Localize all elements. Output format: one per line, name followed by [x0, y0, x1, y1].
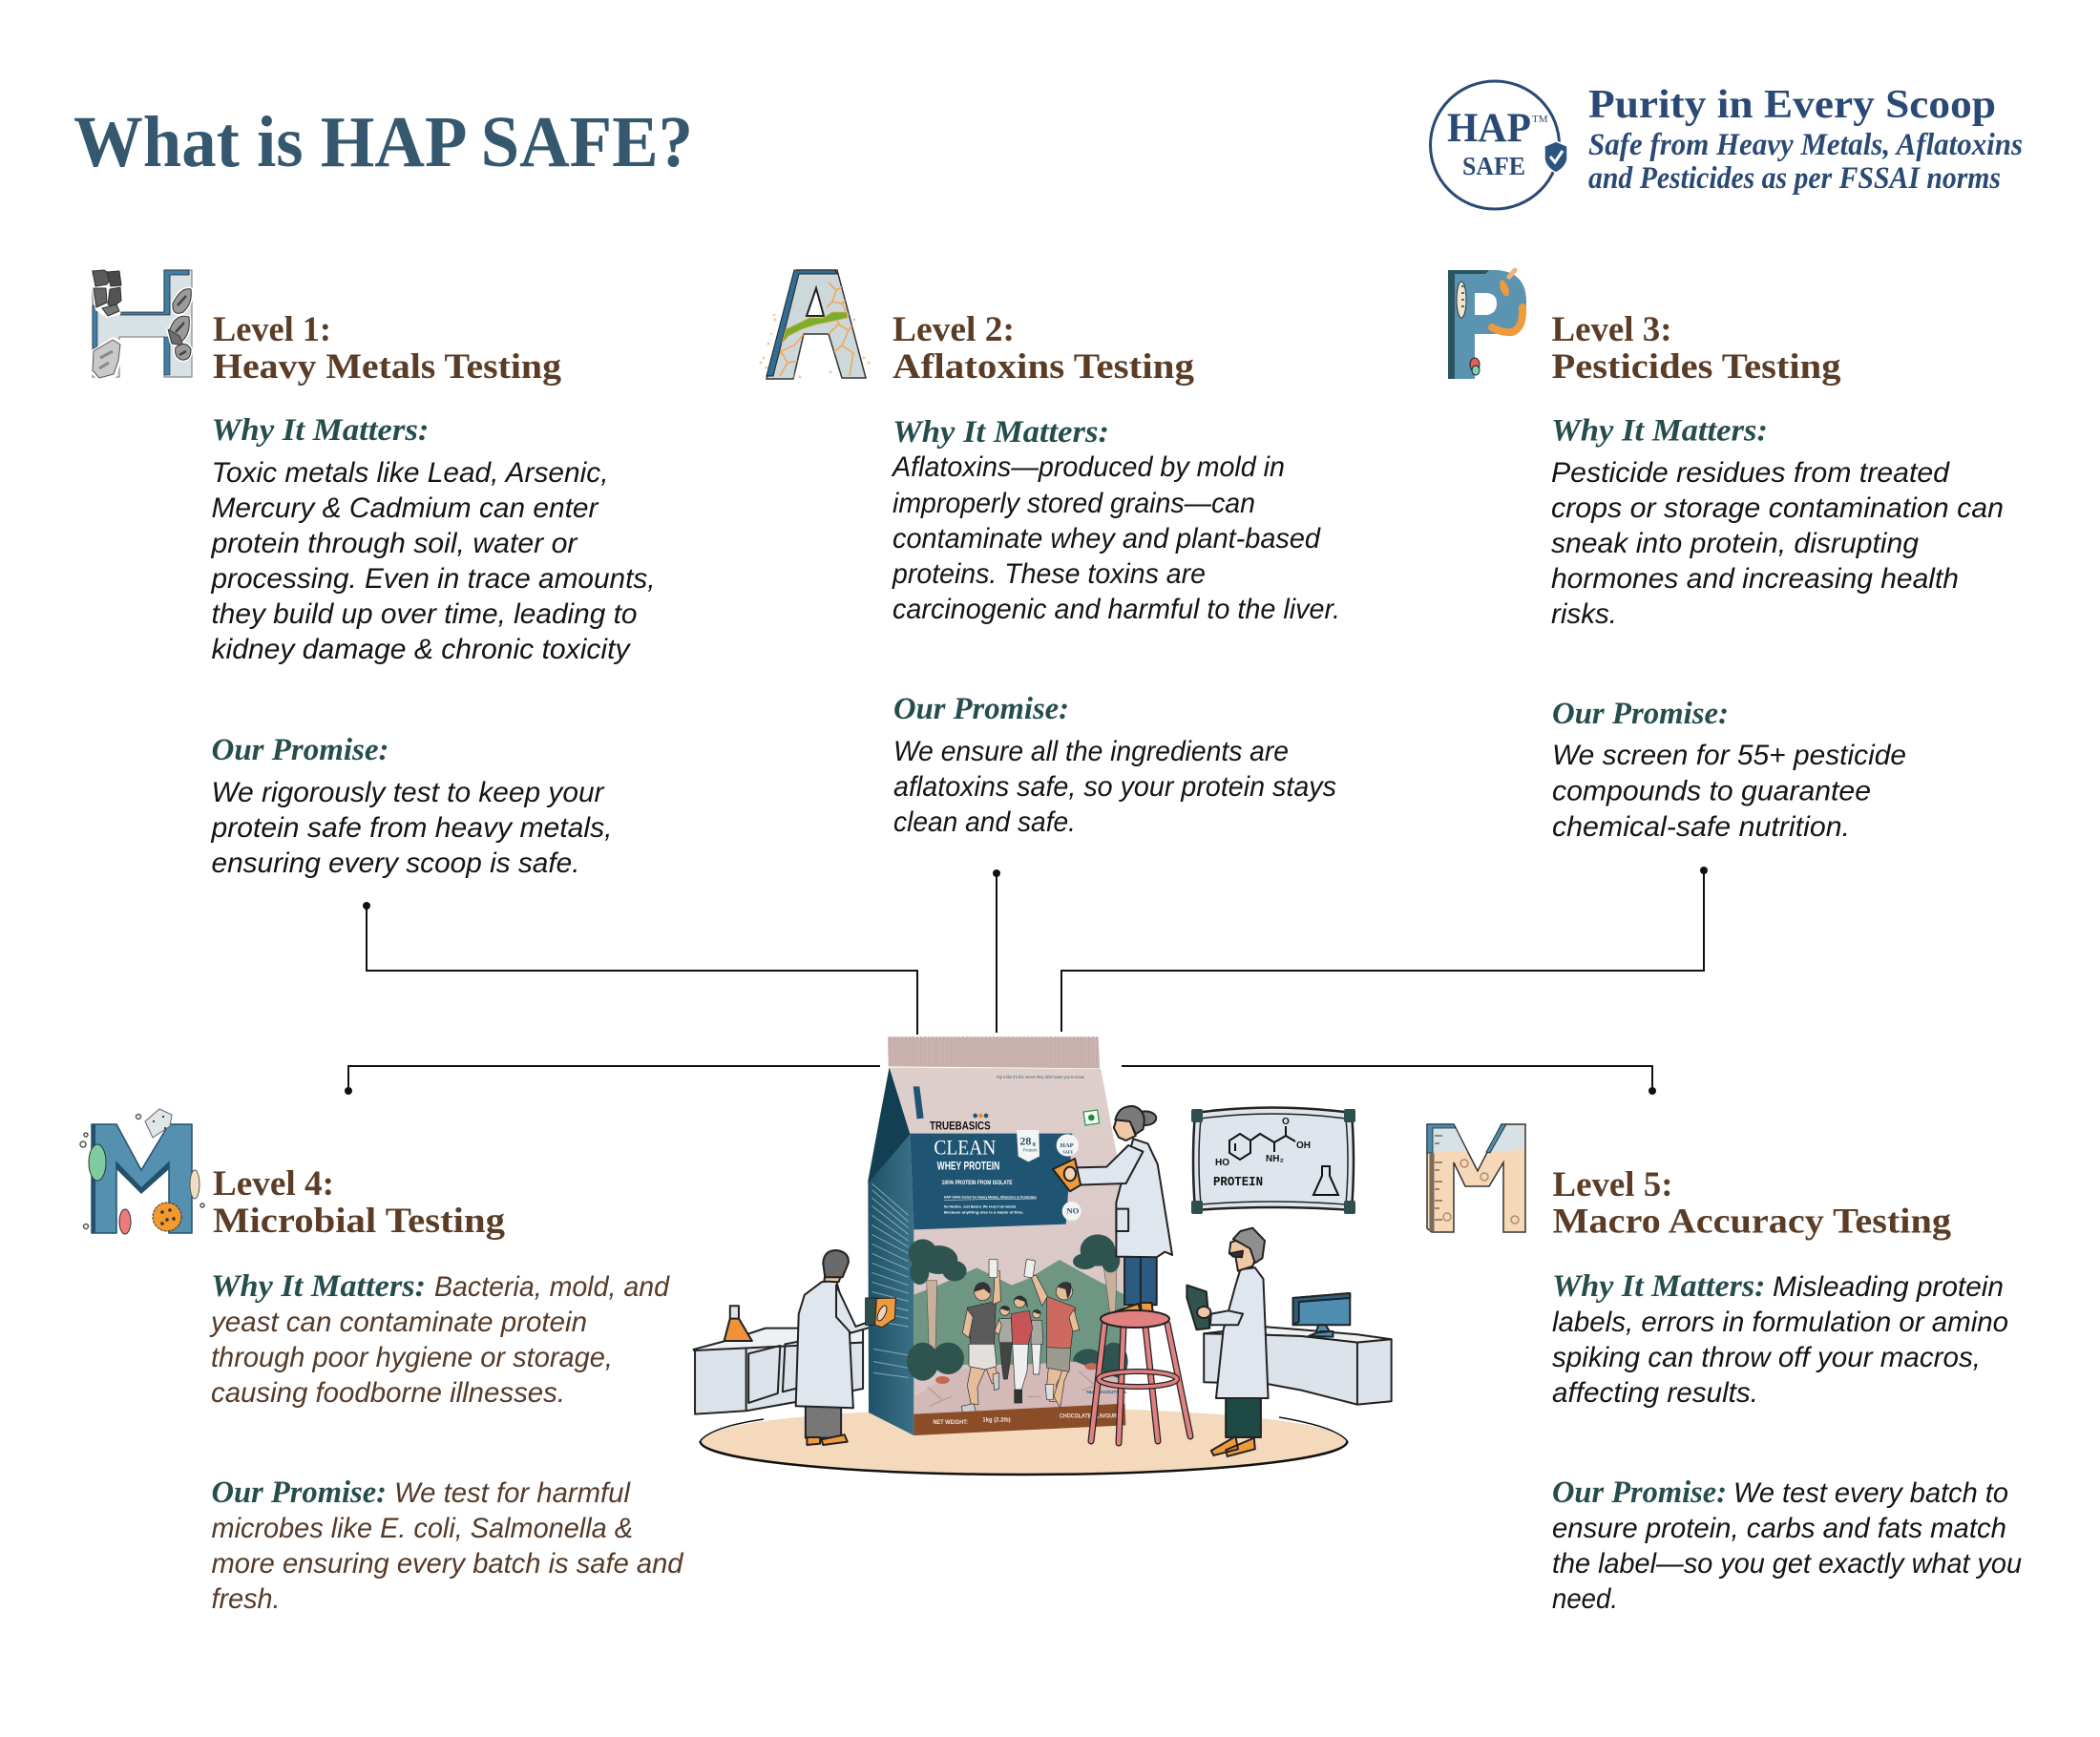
bag label text: Rip it like it's the secret they didn't want you to know. [997, 1075, 1085, 1079]
bag label text: WHEY PROTEIN [937, 1160, 999, 1173]
text: level 1 our promise: protein safe from heavy metals, [210, 812, 613, 844]
bag front face [890, 1067, 1125, 1435]
bag label text: Because anything else is a waste of time. [944, 1209, 1024, 1214]
bag label text: NO [1066, 1205, 1080, 1215]
text: level 4 why it matters: Bacteria, mold, and [434, 1271, 670, 1303]
text: level 3 why it matters: risks. [1551, 598, 1617, 630]
whiteboard: PROTEIN [1213, 1175, 1263, 1190]
brown weight bar [914, 1390, 1127, 1435]
bag crimp top [888, 1036, 1100, 1068]
title: What is HAP SAFE? [74, 102, 693, 182]
text: level 3 our promise: chemical-safe nutrition. [1552, 811, 1850, 843]
tagline: Safe from Heavy Metals, Aflatoxins [1588, 128, 2023, 162]
text: level 2 why it matters: improperly stored grains—can [892, 488, 1255, 519]
logo: HAP SAFE badge: TM [1532, 114, 1548, 125]
text: level 1 our promise: ensuring every scoop is safe. [212, 848, 580, 879]
text: level 4 why it matters: causing foodborne illnesses. [211, 1377, 565, 1409]
product bag [868, 1036, 1128, 1435]
bag label text: No Nasties, Just Basics. We keep it all natural. [944, 1203, 1017, 1208]
text: level 3 our promise [1552, 697, 1906, 843]
text: level 3 why it matters [1551, 414, 2004, 630]
bag label text: CLEAN [934, 1135, 996, 1159]
tagline: Purity in Every Scoop [1588, 83, 1996, 127]
tagline [1588, 83, 2023, 196]
illustration: mountains and trees [907, 1234, 1128, 1414]
right lab bench and monitor [1204, 1293, 1392, 1405]
orange flask [724, 1306, 752, 1341]
text: level 5 our promise: We test every batch to [1733, 1477, 2008, 1509]
text: level 4 our promise: microbes like E. coli, Salmonella & [212, 1513, 633, 1544]
text: level 3 our promise: We screen for 55+ pesticide [1552, 740, 1906, 771]
heading: level 5: Level 5: [1552, 1165, 1672, 1204]
text: level 2 our promise [893, 692, 1336, 838]
whiteboard [1191, 1107, 1355, 1214]
logo: HAP SAFE badge: SAFE [1462, 152, 1525, 180]
text: level 4 our promise [212, 1475, 684, 1615]
tab [914, 1086, 924, 1119]
text: level 5 our promise [1552, 1475, 2022, 1615]
text: level 1 why it matters: processing. Even in trace amounts, [211, 563, 655, 595]
text: level 5 why it matters: Why It Matters: [1552, 1269, 1766, 1304]
heading: level 3: Level 3: [1552, 310, 1672, 349]
brown weight bar: NET WEIGHT: [933, 1419, 968, 1426]
central lab scene [694, 1036, 1392, 1475]
text: level 3 why it matters: crops or storage contamination can [1551, 492, 2004, 524]
text: level 2 why it matters: Why It Matters: [892, 415, 1109, 450]
text: level 2 why it matters [891, 415, 1340, 625]
heading: level 1: Heavy Metals Testing [213, 347, 562, 387]
text: level 3 why it matters: hormones and increasing health [1551, 563, 1959, 595]
bag label text [930, 1075, 1100, 1221]
text: level 5 why it matters: spiking can throw off your macros, [1552, 1342, 1981, 1373]
tagline: and Pesticides as per FSSAI norms [1588, 161, 2001, 196]
text: level 5 why it matters: Misleading protein [1773, 1271, 2004, 1303]
icon: letter M with microbes [80, 1109, 204, 1234]
back right runner [1031, 1309, 1043, 1374]
text: level 3 our promise: Our Promise: [1552, 697, 1729, 731]
left lab bench [694, 1329, 863, 1414]
right runner [1024, 1259, 1080, 1408]
text: level 1 why it matters: Mercury & Cadmium can enter [212, 492, 598, 524]
heading: level 2 [892, 310, 1195, 387]
text: level 2 our promise: We ensure all the ingredients are [893, 736, 1289, 767]
text: level 1 why it matters: protein through soil, water or [210, 528, 578, 559]
text: level 4 why it matters: Why It Matters: [211, 1269, 426, 1304]
text: level 1 our promise: We rigorously test to keep your [212, 777, 605, 808]
text: level 2 why it matters: Aflatoxins—produced by mold in [891, 451, 1285, 483]
heading: level 2: Level 2: [892, 310, 1015, 349]
text: level 1 our promise [210, 733, 613, 879]
text: level 3 why it matters: sneak into protein, disrupting [1551, 528, 1919, 559]
text: level 2 our promise: Our Promise: [893, 692, 1069, 726]
text: level 5 why it matters: labels, errors in formulation or amino [1552, 1307, 2008, 1338]
bag label text: 28 [1019, 1134, 1031, 1147]
brown weight bar: 1kg (2.2lb) [982, 1417, 1011, 1424]
right scientist [1186, 1228, 1269, 1456]
whiteboard: HO [1215, 1158, 1229, 1168]
text: level 1 why it matters: Why It Matters: [212, 413, 430, 448]
text: level 5 our promise: need. [1552, 1583, 1618, 1615]
heading: level 1 [213, 310, 562, 387]
text: level 5 why it matters: affecting results. [1552, 1377, 1758, 1409]
text: level 4 our promise: We test for harmful [394, 1477, 631, 1509]
connector lines [345, 867, 1708, 1095]
heading: level 3: Pesticides Testing [1552, 347, 1841, 387]
heading: level 4: Level 4: [213, 1164, 334, 1203]
left scientist [796, 1250, 878, 1445]
heading: level 5 [1552, 1165, 1952, 1241]
logo: HAP SAFE badge: HAP [1447, 106, 1531, 151]
text: level 3 why it matters: Why It Matters: [1551, 414, 1768, 449]
centre runner [1011, 1296, 1033, 1403]
text: level 1 why it matters: kidney damage & chronic toxicity [212, 634, 632, 665]
text: level 1 our promise: Our Promise: [212, 733, 389, 767]
back left runner [995, 1306, 1013, 1379]
bag label text: g [1033, 1141, 1036, 1147]
bag label text: Protein [1023, 1148, 1038, 1153]
whiteboard: OH [1296, 1141, 1311, 1151]
whiteboard: NH₂ [1266, 1154, 1284, 1164]
heading: level 4: Microbial Testing [213, 1202, 506, 1241]
logo: HAP SAFE badge [1430, 81, 1567, 209]
blue label panel [910, 1134, 1072, 1229]
brown weight bar: NUTRACEUTICAL [1086, 1390, 1127, 1395]
illustration: runners [961, 1259, 1080, 1413]
bag label text: TRUEBASICS [930, 1119, 991, 1132]
icon: letter A with mold [760, 270, 871, 379]
heading: level 2: Aflatoxins Testing [892, 347, 1195, 387]
left runner [961, 1259, 1000, 1413]
icon: letter M with macro ruler [1427, 1124, 1525, 1232]
text: level 1 why it matters: they build up over time, leading to [212, 598, 638, 630]
text: level 5 why it matters [1552, 1269, 2008, 1409]
bag side panel [868, 1067, 914, 1435]
text: level 5 our promise: Our Promise: [1552, 1475, 1727, 1510]
text: level 5 our promise: ensure protein, carbs and fats match [1552, 1513, 2006, 1544]
text: level 2 why it matters: carcinogenic and harmful to the liver. [892, 594, 1340, 625]
icon: letter P with pests [1448, 270, 1526, 379]
bag label text: SAFE [1062, 1150, 1074, 1155]
bag label text: HAP [1060, 1142, 1074, 1149]
pink stool [1091, 1310, 1190, 1443]
heading: level 3 [1552, 310, 1841, 387]
text: level 2 our promise: clean and safe. [893, 806, 1076, 838]
text: level 3 our promise: compounds to guarantee [1552, 775, 1871, 807]
text: level 4 why it matters [209, 1269, 670, 1409]
bag label text: 100% PROTEIN FROM ISOLATE [942, 1180, 1013, 1186]
text: level 1 why it matters [210, 413, 655, 665]
text: level 3 why it matters: Pesticide residues from treated [1551, 457, 1950, 489]
text: level 2 our promise: aflatoxins safe, so your protein stays [893, 771, 1336, 803]
left sponge [866, 1298, 895, 1328]
text: level 4 why it matters: through poor hygiene or storage, [211, 1342, 613, 1373]
text: level 4 our promise: more ensuring every batch is safe and [212, 1548, 684, 1580]
text: level 1 why it matters: Toxic metals like Lead, Arsenic, [212, 457, 609, 489]
ground ellipse [701, 1408, 1348, 1475]
bag label text: HAP-SAFE tested for Heavy Metals, Aflatoxins & Pesticides [944, 1195, 1037, 1200]
heading: level 1: Level 1: [213, 310, 331, 349]
text: level 5 our promise: the label—so you get exactly what you [1552, 1548, 2022, 1580]
text: level 4 our promise: fresh. [212, 1583, 281, 1615]
icon: letter H with metals [90, 269, 192, 381]
brown weight bar: CHOCOLATE FLAVOUR [1060, 1413, 1117, 1420]
heading: level 4 [213, 1164, 506, 1241]
scientist on stool [1053, 1106, 1172, 1319]
whiteboard: O [1282, 1117, 1290, 1127]
text: level 4 why it matters: yeast can contaminate protein [209, 1307, 587, 1338]
heading: level 5: Macro Accuracy Testing [1552, 1203, 1952, 1241]
text: level 2 why it matters: proteins. These toxins are [892, 558, 1206, 590]
text: level 4 our promise: Our Promise: [212, 1475, 387, 1510]
text: level 2 why it matters: contaminate whey and plant-based [892, 523, 1321, 555]
